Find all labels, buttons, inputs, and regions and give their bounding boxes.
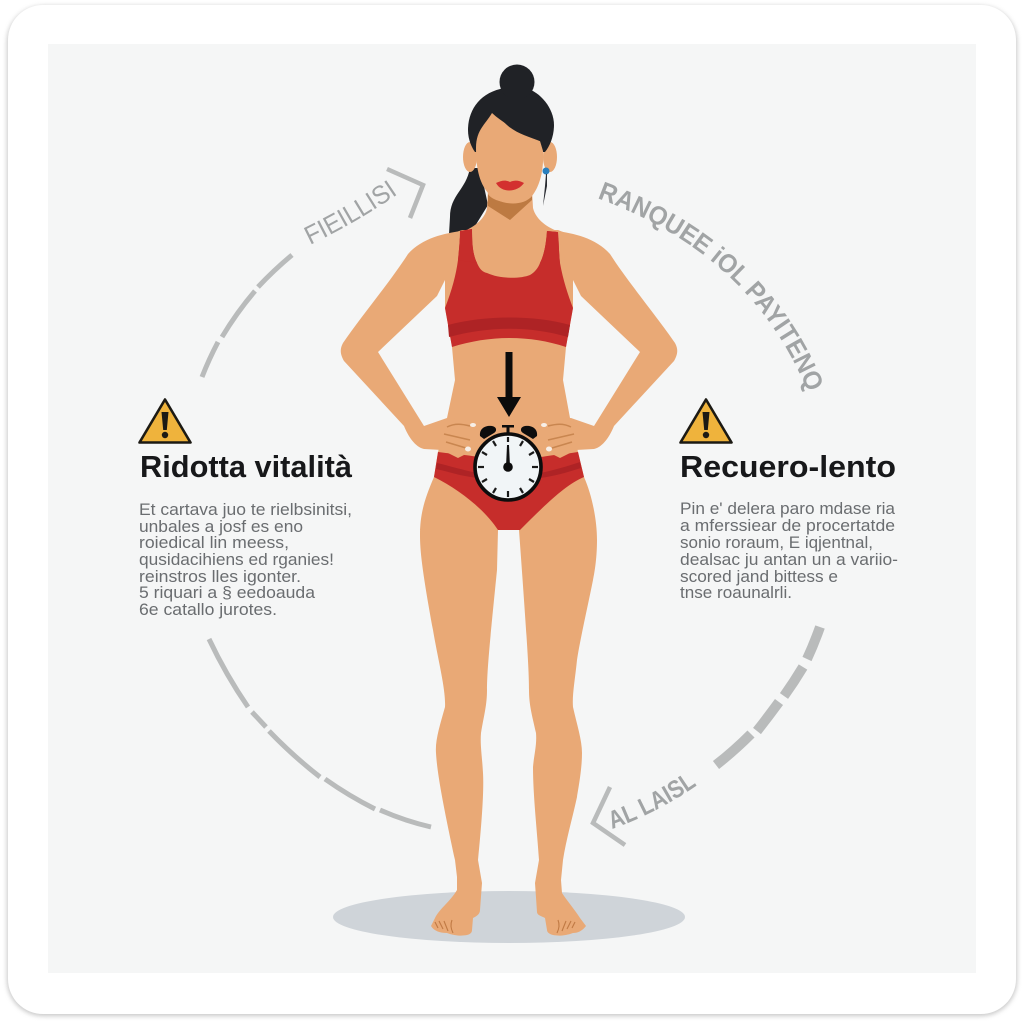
cycle arc: lower left	[209, 639, 431, 827]
hand details: left	[444, 424, 470, 448]
fingernails	[465, 423, 552, 452]
text block: 6e catallo jurotes.	[139, 601, 277, 619]
torso	[420, 230, 596, 530]
cycle arc: lower right	[716, 627, 820, 765]
neck shadow	[488, 194, 532, 220]
label: upper left arc text: FIEILLISI	[304, 180, 396, 244]
text block: Et cartava juo te rielbsinitsi,	[139, 501, 352, 519]
text block: reinstros lles igonter.	[139, 568, 301, 586]
clock ticks	[478, 437, 538, 497]
text block	[680, 500, 898, 602]
text block: qusidacihiens ed rganies!	[139, 551, 334, 569]
text block: unbales a josf es eno	[139, 518, 303, 536]
icon: warning triangle	[140, 400, 190, 442]
ponytail	[449, 168, 488, 234]
briefs	[434, 452, 584, 530]
icon: warning triangle	[680, 400, 732, 442]
arrow: lower right chevron	[593, 787, 625, 845]
panel: right warning	[680, 400, 898, 602]
neck	[462, 190, 560, 232]
panel: left warning	[139, 400, 353, 619]
left arm	[341, 231, 475, 458]
face	[476, 113, 543, 203]
hair back	[468, 88, 554, 152]
lips	[496, 181, 524, 191]
text block: scored jand bittess e	[680, 568, 838, 586]
text block: 5 riquari a § eedoauda	[139, 584, 316, 602]
icon: alarm clock	[475, 425, 541, 500]
arrow: down to clock	[497, 352, 521, 417]
clock bells	[480, 425, 537, 439]
text block: roiedical lin meess,	[139, 534, 289, 552]
left leg	[420, 477, 498, 936]
earring	[542, 168, 550, 206]
text block: dealsac ju antan un a variio-	[680, 551, 898, 569]
right arm	[543, 231, 677, 458]
floor shadow	[333, 891, 685, 943]
hand details: right	[548, 424, 574, 448]
figure: woman	[341, 64, 677, 936]
right leg	[519, 477, 597, 936]
label: lower right arc text: AL LAISL	[611, 776, 696, 829]
heading: Ridotta vitalità	[140, 450, 353, 484]
text block: Pin e' delera paro mdase ria	[680, 500, 896, 518]
toe lines	[435, 920, 575, 933]
clock hands	[506, 445, 510, 467]
clock face	[475, 434, 541, 500]
hair strand	[500, 117, 542, 142]
briefs band	[436, 462, 581, 478]
cycle arc: upper left	[202, 255, 292, 377]
heading: Recuero-lento	[680, 450, 896, 484]
bra straps over shoulders	[458, 229, 560, 263]
bra	[445, 229, 573, 347]
label: upper right arc text: RANQUEE iOL PAYITENQ	[598, 182, 822, 392]
text block: tnse roaunalrli.	[680, 584, 792, 602]
hair bun	[500, 64, 534, 100]
bra band	[448, 318, 570, 337]
text block	[139, 501, 352, 619]
text block: sonio roraum, E iqjentnal,	[680, 534, 873, 552]
text block: a mferssiear de procertatde	[680, 517, 895, 535]
ears	[463, 142, 477, 172]
arrow: upper left chevron	[387, 169, 423, 218]
